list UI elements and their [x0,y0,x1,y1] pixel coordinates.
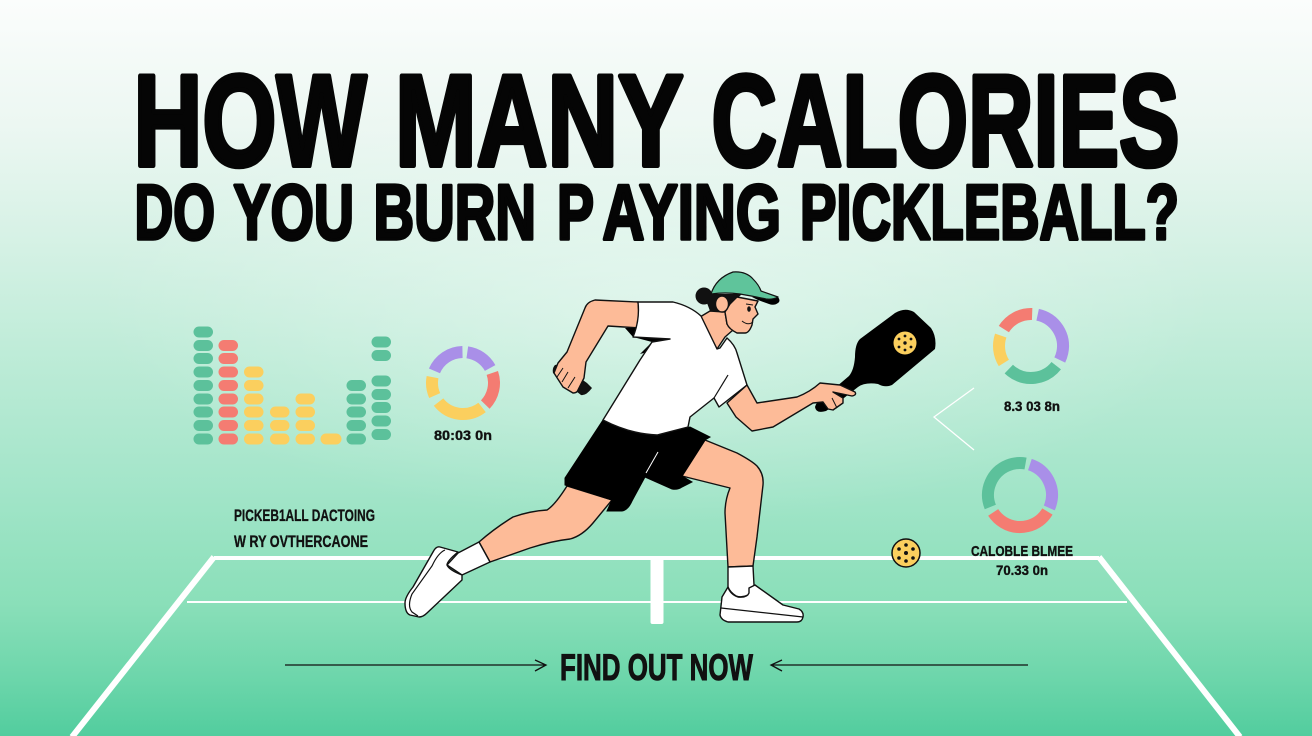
player figure [405,272,936,622]
eyebrow [746,304,753,305]
bar column 1 [194,326,213,444]
back hand finger lines [557,368,575,388]
call to action [285,647,1028,688]
title line 1 [134,48,1180,194]
neck [700,311,733,349]
underarm shadow [625,328,672,354]
back shoe [405,547,462,617]
title line 2: DO [134,168,215,256]
icon: pickleball [892,539,920,567]
head [696,272,780,333]
smile [742,321,753,324]
cta text: FIND OUT NOW [560,647,753,688]
shirt [603,302,747,435]
racket grip back hand [553,364,592,395]
donut top right label: 8.3 03 8n [1004,398,1060,414]
title line 1: HOW [134,48,367,194]
hair bun [696,288,712,304]
bar column 4 [270,406,290,444]
front leg [682,440,763,567]
chevron [934,388,974,450]
title line 2: P [557,168,594,256]
bar column 6 [320,434,342,444]
donut chart top right [986,301,1076,391]
pickleball court lines [72,557,1240,736]
ear [716,296,728,312]
bar chart of pills [194,326,391,444]
title line 1: MANY [395,48,684,194]
hair [707,294,742,312]
paddle [815,310,936,412]
front sock [728,566,754,597]
back sock [447,542,490,575]
donut chart left [419,339,507,427]
donut chart lower right [976,451,1064,539]
shorts [565,420,710,511]
title line 2 [134,168,1179,256]
left caption: PICKEB1ALL DACTOING [234,506,375,525]
right arrow [771,660,1028,671]
back leg [479,486,612,562]
face [725,297,758,333]
title line 2: BURN [374,168,536,256]
title [134,48,1180,256]
bar column 5 [296,394,315,444]
paddle ball [894,332,916,354]
cap brim underside [752,297,780,305]
donut left label: 80:03 0n [434,427,492,443]
bar column 2 [218,340,238,444]
calorie value: 70.33 0n [996,562,1048,578]
eye [747,306,751,312]
back arm and fist [554,300,640,393]
left caption [234,506,375,551]
bar column 3 [244,366,264,444]
front arm and hand [727,383,856,431]
title line 2: YOU [234,168,354,256]
title line 2: AYING [602,168,781,256]
left arrow [285,660,546,671]
front hand finger line [832,398,837,408]
calorie label: CALOBLE BLMEE [971,543,1073,560]
bar column 8 [372,336,391,440]
left caption: W RY OVTHERCAONE [234,532,368,551]
cap [711,272,778,299]
bar column 7 [346,380,366,444]
front shoe [720,585,803,622]
